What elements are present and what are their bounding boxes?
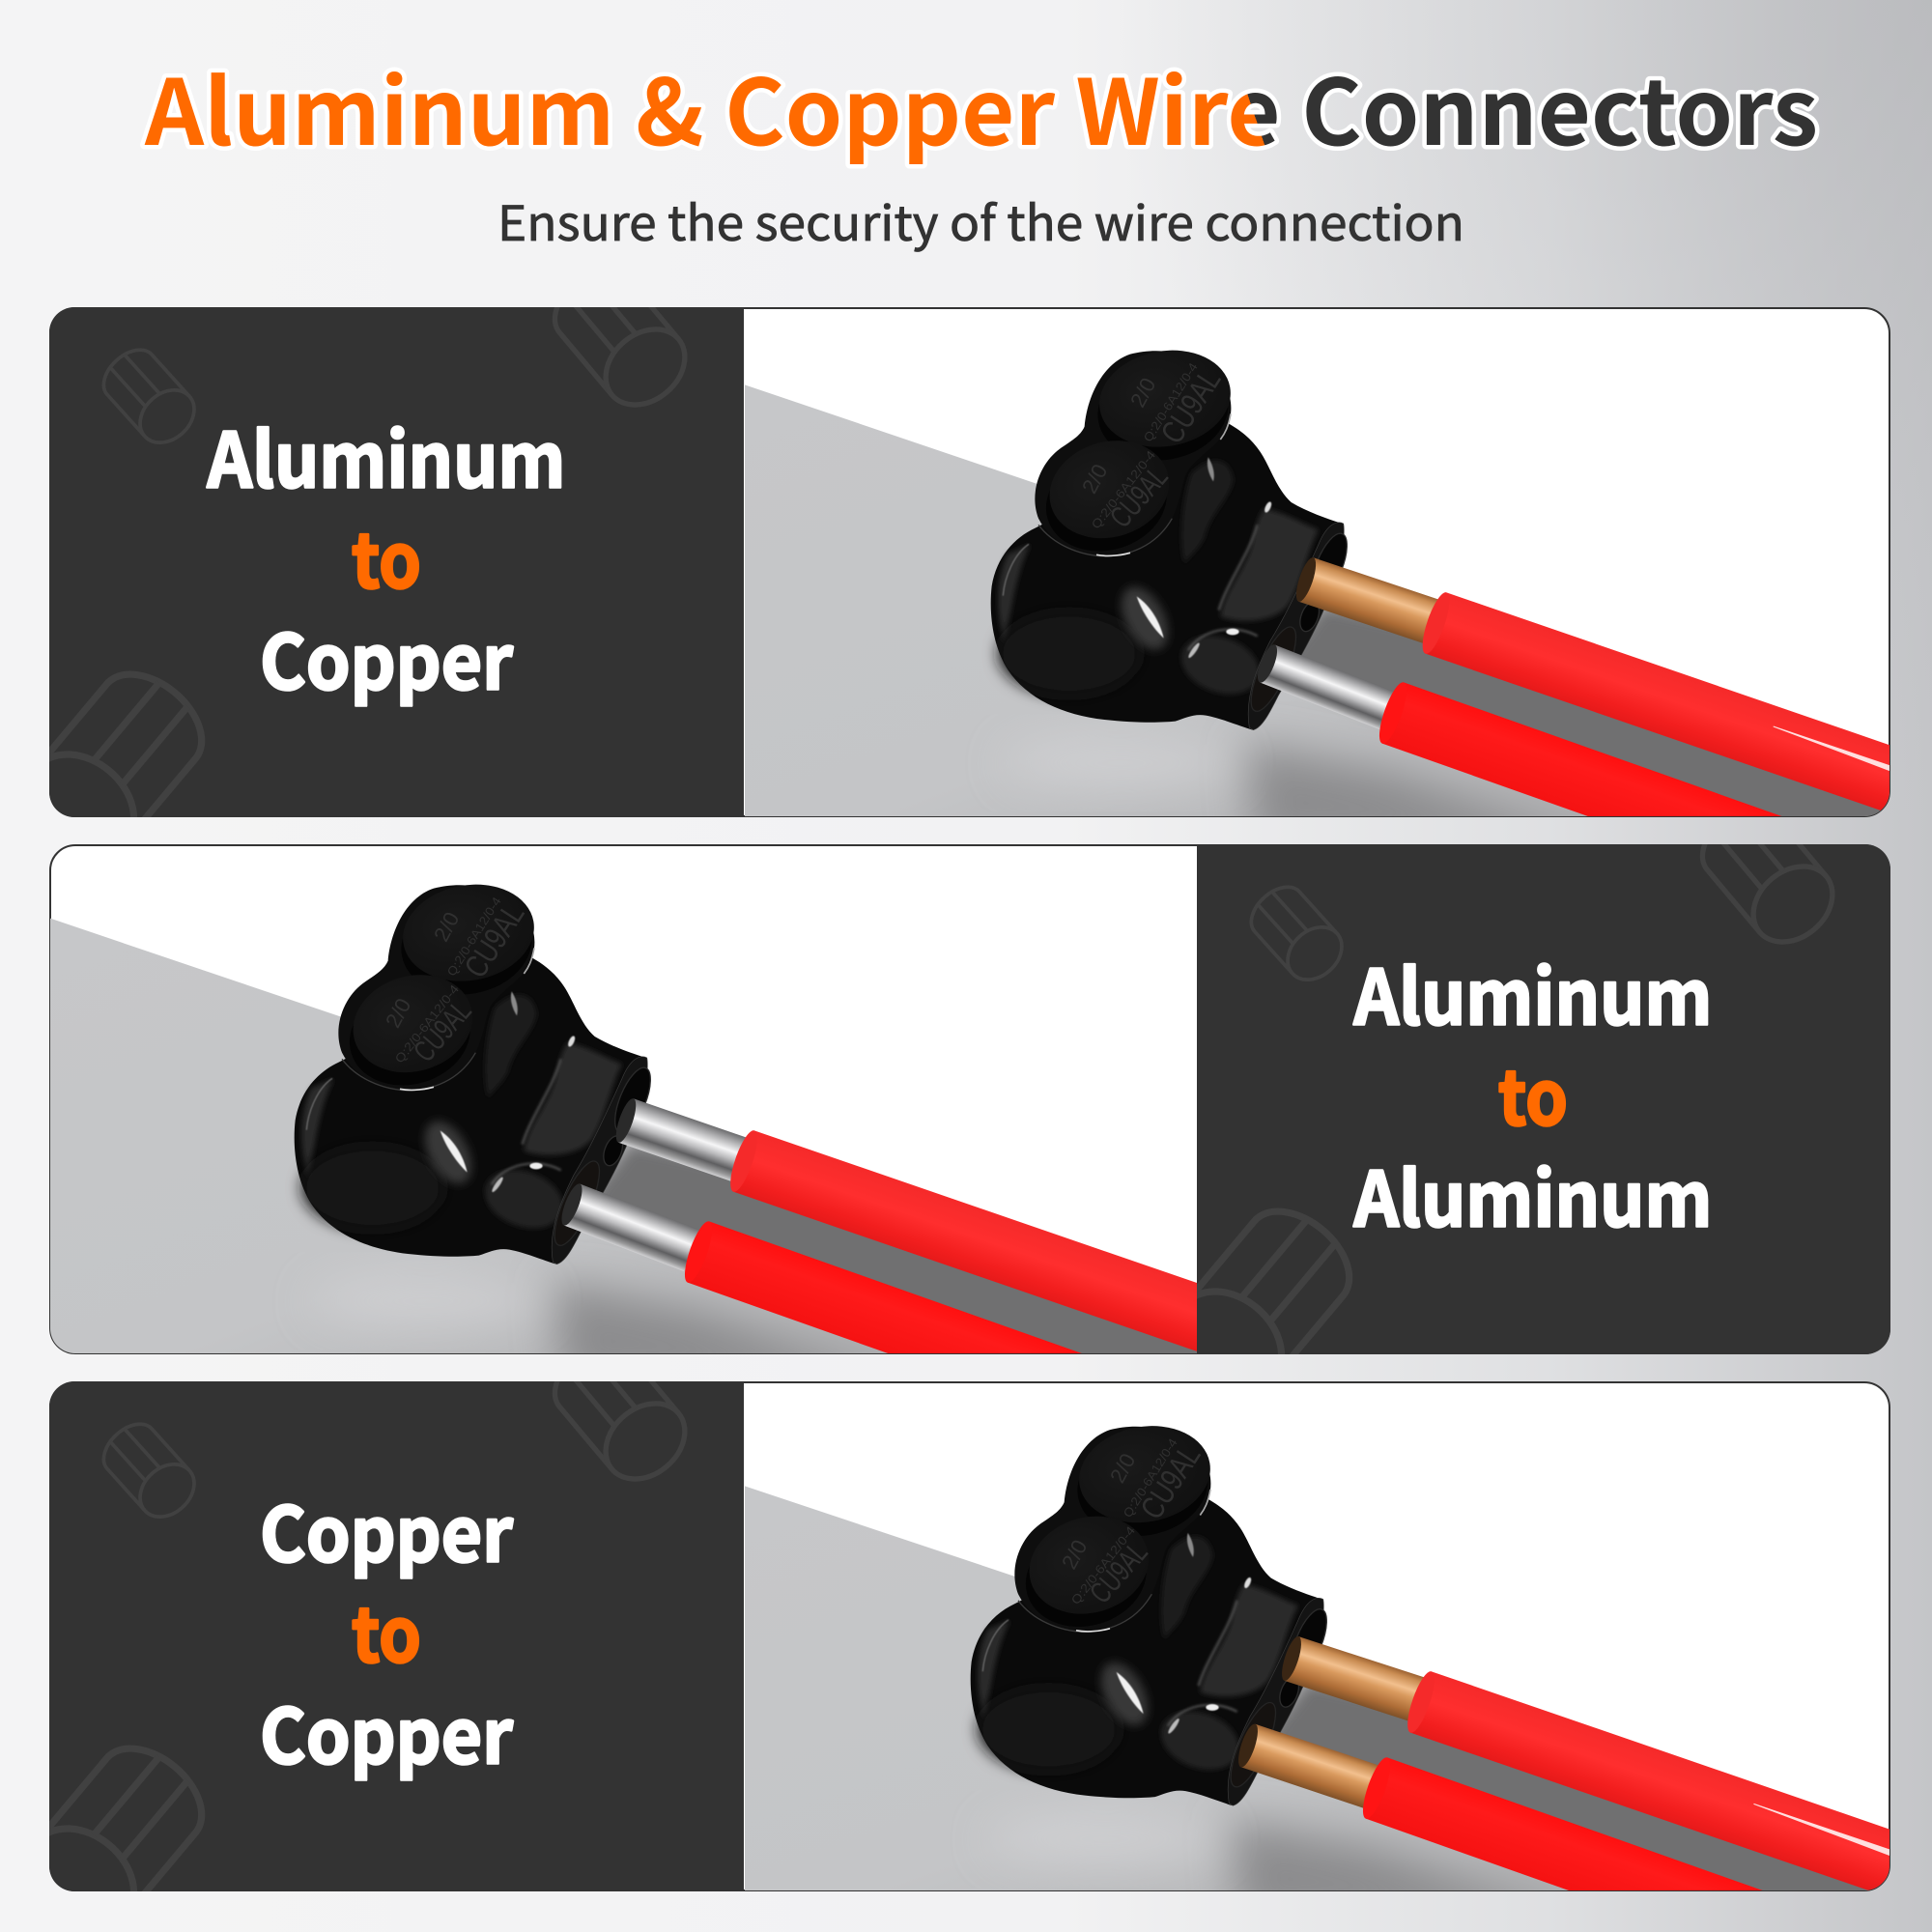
dark label block: copper to copper: [49, 1381, 744, 1891]
connector: CU9AL: [458, 897, 531, 984]
connector: 2/0: [381, 994, 415, 1032]
connector: 2/0: [1125, 374, 1160, 412]
copper wire, upper: [1296, 557, 1437, 643]
dark label block: aluminum to copper: [49, 307, 744, 817]
connector: 2/0: [1057, 1536, 1092, 1574]
aluminum wire, lower: [557, 1181, 699, 1271]
dark label block: aluminum to aluminum: [1197, 844, 1890, 1354]
connector: Q:2/0-6A12/0-4: [392, 982, 462, 1065]
red insulation, upper: [1407, 1671, 1889, 1890]
dark label block: copper to copper: Copper: [260, 1476, 514, 1584]
connector: 2/0: [429, 908, 464, 946]
connector: 2/0: [1105, 1449, 1140, 1487]
panel: aluminum to aluminum: [49, 844, 1890, 1354]
red insulation, upper: [1422, 592, 1889, 810]
connector: Q:2/0-6A12/0-4: [1089, 448, 1158, 531]
connector: CU9AL: [406, 993, 478, 1068]
connector: CU9AL: [1082, 1535, 1154, 1609]
panel: aluminum to copper: [49, 307, 1890, 817]
connector: 2/0: [1077, 460, 1112, 497]
aluminum wire, upper: [612, 1096, 748, 1181]
connector: Q:2/0-6A12/0-4: [1068, 1524, 1138, 1607]
connector: [295, 874, 658, 1264]
red insulation, lower: [684, 1221, 1082, 1353]
product photo: aluminum to copper connector: [745, 350, 1889, 816]
product photo: aluminum to aluminum connector: [50, 885, 1197, 1353]
dark label block: aluminum to aluminum: to: [1498, 1039, 1568, 1148]
dark label block: aluminum to aluminum: Aluminum: [1353, 939, 1712, 1047]
title: Aluminum & Copper Wire Connectors: [144, 41, 1818, 172]
connector: Q:2/0-6A12/0-4: [1141, 360, 1201, 444]
dark label block: aluminum to copper: Aluminum: [207, 402, 566, 510]
product photo: copper to copper connector: [745, 1426, 1889, 1890]
red insulation, upper: [730, 1130, 1197, 1351]
connector: CU9AL: [1102, 459, 1175, 534]
dark label block: aluminum to aluminum: Aluminum: [1353, 1140, 1712, 1248]
connector: [991, 340, 1354, 730]
copper wire, upper: [1282, 1636, 1424, 1721]
copper wire, lower: [1238, 1723, 1378, 1808]
connector: CU9AL: [1154, 363, 1228, 450]
panel: copper to copper: [49, 1381, 1890, 1891]
subtitle: Ensure the security of the wire connection: [497, 185, 1464, 255]
red insulation, lower: [1362, 1757, 1762, 1890]
dark label block: copper to copper: Copper: [260, 1677, 514, 1785]
connector: CU9AL: [1134, 1438, 1208, 1526]
dark label block: aluminum to copper: Copper: [260, 603, 514, 711]
red insulation, lower: [1379, 682, 1781, 816]
connector: [971, 1416, 1334, 1805]
aluminum wire, lower: [1254, 642, 1395, 729]
connector: Q:2/0-6A12/0-4: [444, 895, 504, 979]
dark label block: copper to copper: to: [352, 1577, 421, 1685]
dark label block: aluminum to copper: to: [352, 502, 421, 611]
connector: Q:2/0-6A12/0-4: [1121, 1436, 1180, 1520]
